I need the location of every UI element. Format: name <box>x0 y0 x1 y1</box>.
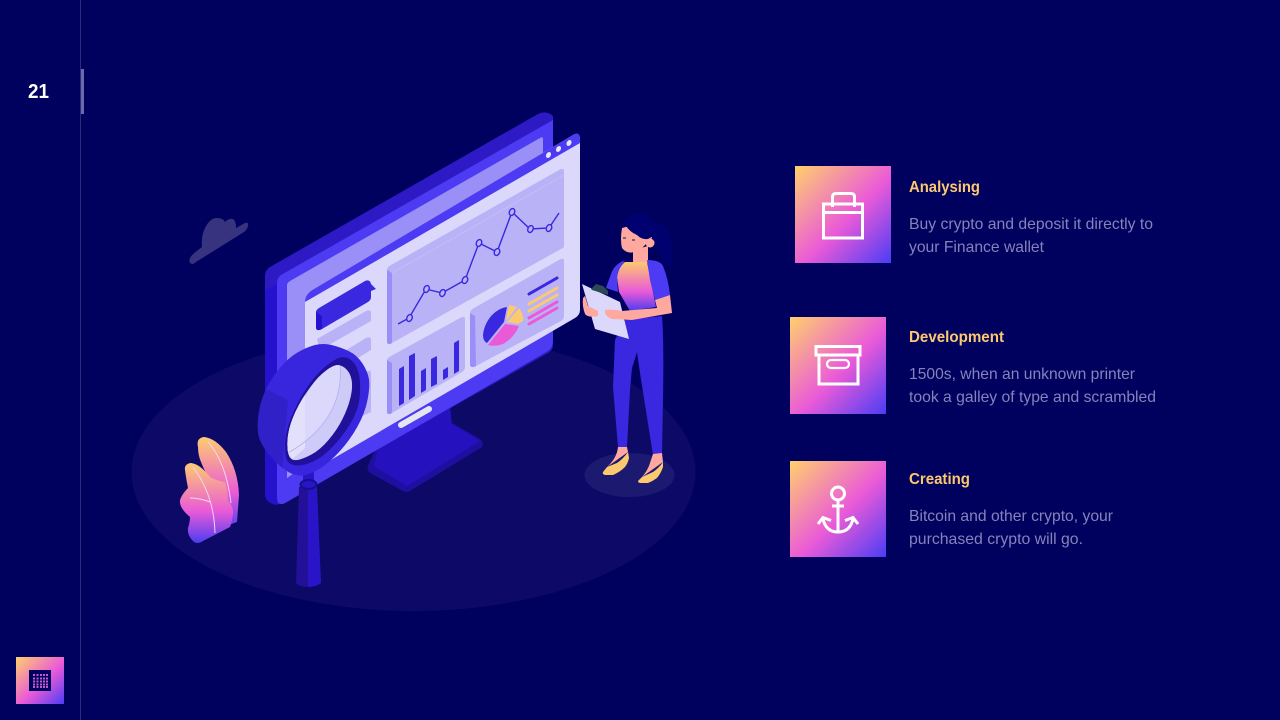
ankles <box>607 447 663 477</box>
page number: 21 <box>28 81 49 103</box>
neck <box>633 246 648 266</box>
eyes <box>623 238 635 240</box>
ring <box>258 344 369 476</box>
hair <box>622 213 657 239</box>
back leaf <box>198 437 239 530</box>
ground ellipse <box>132 333 696 611</box>
ring inner rim <box>285 357 360 466</box>
pie legend lines <box>529 278 557 324</box>
face <box>621 222 652 253</box>
magnifying glass <box>258 344 370 587</box>
description: purchased crypto will go. <box>909 531 1083 548</box>
bar chart panel <box>387 317 465 414</box>
description: Bitcoin and other crypto, your <box>909 508 1114 525</box>
description: your Finance wallet <box>909 239 1045 256</box>
jacket <box>606 261 625 292</box>
arm and hand <box>605 295 672 320</box>
description: took a galley of type and scrambled <box>909 389 1156 406</box>
isometric illustration <box>132 112 696 611</box>
plant leaves <box>180 437 239 543</box>
heading: Analysing <box>909 179 980 196</box>
window title bar <box>305 134 580 302</box>
shirt <box>617 262 656 311</box>
description <box>909 216 1153 256</box>
heading: Development <box>909 329 1005 346</box>
window dots <box>545 139 573 159</box>
icon: cloud <box>189 218 248 264</box>
line chart panel <box>387 169 564 344</box>
item: Analysing <box>795 166 1153 263</box>
item: Development <box>790 317 1156 414</box>
heading: Creating <box>909 471 970 488</box>
front leaf <box>180 463 233 543</box>
trousers <box>613 316 663 455</box>
description <box>909 366 1156 406</box>
dark menu button <box>316 280 376 330</box>
woman with clipboard <box>582 213 674 497</box>
left hand <box>583 296 598 317</box>
bezel <box>287 137 543 478</box>
monitor body <box>265 112 580 505</box>
description: Buy crypto and deposit it directly to <box>909 216 1153 233</box>
handle <box>296 472 321 587</box>
description <box>909 508 1114 548</box>
icon tile: archive box <box>790 317 886 414</box>
monitor back edge <box>265 112 553 505</box>
sidebar <box>28 0 84 720</box>
icon tile: anchor <box>790 461 886 557</box>
item: Creating <box>790 461 1114 557</box>
icon tile: bag <box>795 166 891 263</box>
clipboard <box>582 284 629 339</box>
pie chart panel <box>470 259 564 367</box>
monitor front face <box>277 120 553 504</box>
clipboard clip <box>591 284 608 295</box>
description: 1500s, when an unknown printer <box>909 366 1136 383</box>
screen window <box>305 134 580 475</box>
ponytail <box>650 222 672 266</box>
pie chart <box>483 305 523 346</box>
lens <box>287 365 352 460</box>
monitor power pill <box>401 409 429 425</box>
left menu panels <box>316 280 376 421</box>
foot shadow <box>584 453 674 497</box>
shoes <box>603 452 629 475</box>
logo badge <box>16 657 64 704</box>
monitor stand <box>368 405 483 492</box>
